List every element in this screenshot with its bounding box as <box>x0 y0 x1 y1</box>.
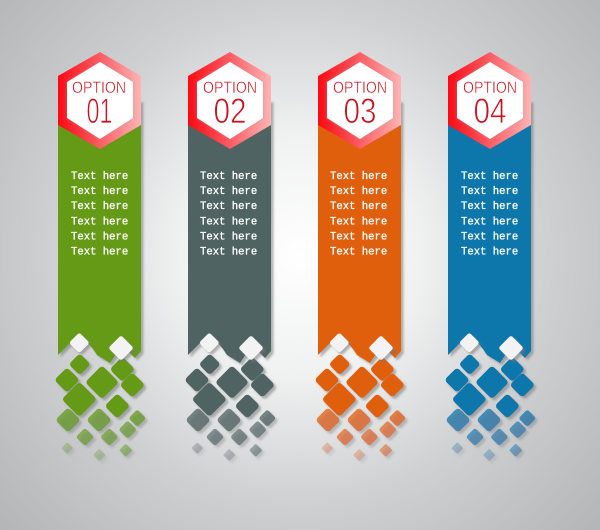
text list 04: Text here <box>461 171 518 183</box>
text list 03: Text here <box>330 216 387 228</box>
panel: option 02 <box>185 52 275 461</box>
green ribbon <box>58 100 141 363</box>
green tile cluster <box>55 354 145 461</box>
text list 01: Text here <box>71 232 128 244</box>
badge number 04: 04 <box>474 92 506 131</box>
text list 02: Text here <box>200 186 257 198</box>
badge number 02: 02 <box>214 92 246 131</box>
ribbon notches <box>329 332 394 361</box>
text list 01 <box>71 171 128 258</box>
grey tile cluster <box>185 354 275 461</box>
hexagon badge 02 <box>188 52 271 149</box>
text list 04: Text here <box>461 232 518 244</box>
text list 03 <box>330 171 387 258</box>
hexagon badge 01 <box>58 52 141 149</box>
text list 01: Text here <box>71 201 128 213</box>
text list 03: Text here <box>330 201 387 213</box>
orange tile cluster <box>315 354 405 461</box>
text list 03: Text here <box>330 246 387 258</box>
text list 01: Text here <box>71 186 128 198</box>
text list 03: Text here <box>330 171 387 183</box>
ribbon notches <box>69 332 134 361</box>
text list 01: Text here <box>71 171 128 183</box>
text list 02: Text here <box>200 232 257 244</box>
blue tile cluster <box>445 354 535 461</box>
ribbon notches <box>199 332 264 361</box>
text list 03: Text here <box>330 186 387 198</box>
panel: option 03 <box>315 52 405 461</box>
text list 04: Text here <box>461 246 518 258</box>
grey ribbon <box>188 100 271 363</box>
badge label 02: OPTION <box>203 79 257 97</box>
text list 01: Text here <box>71 246 128 258</box>
orange ribbon <box>318 100 401 363</box>
badge number 03: 03 <box>344 92 376 131</box>
panel: option 04 <box>445 52 535 461</box>
badge number 01: 01 <box>86 92 112 131</box>
text list 03: Text here <box>330 232 387 244</box>
text list 04 <box>461 171 518 258</box>
blue ribbon <box>448 100 531 363</box>
text list 02: Text here <box>200 246 257 258</box>
text list 02: Text here <box>200 171 257 183</box>
hexagon badge 04 <box>448 52 531 149</box>
text list 02: Text here <box>200 201 257 213</box>
badge label 03: OPTION <box>333 79 387 97</box>
badge label 04: OPTION <box>463 79 517 97</box>
badge label 01: OPTION <box>72 79 126 97</box>
text list 04: Text here <box>461 186 518 198</box>
panel: option 01 <box>55 52 145 461</box>
text list 04: Text here <box>461 201 518 213</box>
text list 04: Text here <box>461 216 518 228</box>
text list 02: Text here <box>200 216 257 228</box>
text list 02 <box>200 171 257 258</box>
hexagon badge 03 <box>318 52 401 149</box>
text list 01: Text here <box>71 216 128 228</box>
ribbon notches <box>459 332 524 361</box>
